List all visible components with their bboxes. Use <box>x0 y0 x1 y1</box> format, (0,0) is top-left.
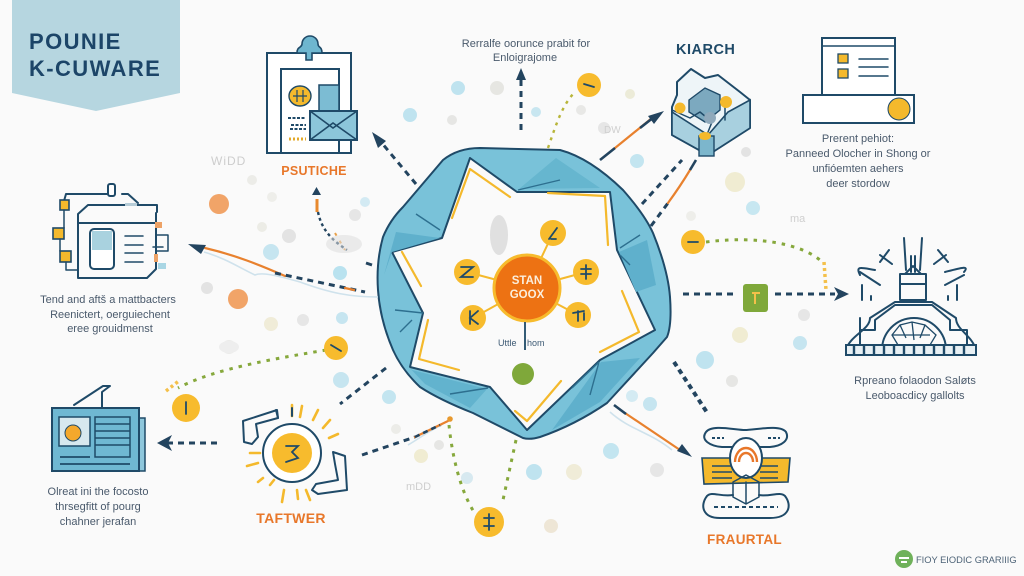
text <box>786 133 931 190</box>
icon: device with connectors <box>53 184 168 278</box>
footer logo: FIOY EIODIC GRARIIIG <box>916 555 1017 565</box>
panel: PSUTICHE clipboard <box>267 36 357 178</box>
coin: right <box>681 230 705 254</box>
text <box>40 294 176 335</box>
hub: central orange circle and spokes: GOOX <box>510 289 545 301</box>
icon: temple <box>846 238 976 355</box>
hub node: left <box>454 259 480 285</box>
hub node: lower right <box>565 302 591 328</box>
text: Olreat ini the focosto <box>48 486 148 498</box>
arrow: dashes below KIARCH <box>642 160 696 226</box>
hub caption: hom <box>527 338 545 348</box>
label: PSUTICHE <box>281 164 347 178</box>
icon: screen with tray <box>803 38 914 123</box>
coin: lower left <box>172 394 200 422</box>
text: Reenictert, oerguiechent <box>50 309 170 321</box>
scattered background dots <box>201 81 810 533</box>
text block: top caption: Enloigrajome <box>493 52 557 64</box>
title banner: K-CUWARE <box>29 56 161 81</box>
footer logo <box>895 550 1017 568</box>
arrow: dotted to top coin <box>548 92 575 148</box>
label: TAFTWER <box>256 510 326 526</box>
arrow: to top caption <box>516 68 526 130</box>
arrow: dashes to lower right panel <box>674 362 708 414</box>
arrow: dotted to left coin <box>166 350 326 391</box>
text <box>854 375 976 402</box>
arrow: dotted to right coin and beyond <box>706 240 826 290</box>
text: deer stordow <box>826 178 890 190</box>
panel: left machine <box>40 184 176 335</box>
hub caption: Uttle <box>498 338 517 348</box>
icon: document card <box>52 386 145 471</box>
heading: KIARCH <box>676 42 735 58</box>
text: Leoboacdicy gallolts <box>865 390 965 402</box>
scattered background dots: WiDD <box>211 154 246 168</box>
title banner: POUNIE <box>29 29 122 54</box>
panel: FRAURTAL <box>702 428 790 547</box>
coin: top <box>577 73 601 97</box>
hub node: right <box>573 259 599 285</box>
icon: badge with ribbon <box>702 428 790 518</box>
scattered background dots: mDD <box>406 481 431 493</box>
text: chahner jerafan <box>60 516 136 528</box>
text: Tend and aftš a mattbacters <box>40 294 176 306</box>
coin: bottom <box>474 507 504 537</box>
hub caption <box>498 322 545 350</box>
text: Rpreano folaodon Saløts <box>854 375 976 387</box>
arrows <box>157 68 849 537</box>
icon: isometric structure <box>672 69 750 156</box>
arrow: dash to lower-left document <box>157 435 217 451</box>
arrow: to top-left panel <box>372 132 416 184</box>
panel: lower-left document <box>48 386 148 528</box>
text: Prerent pehiot: <box>822 133 894 145</box>
text: eree grouidmenst <box>67 323 153 335</box>
hub: central orange circle and spokes: STAN <box>512 275 542 287</box>
arrow: mottled up arrow below PSUTICHE <box>312 187 372 265</box>
scattered background dots: DW <box>604 125 621 136</box>
text: unfióemten aehers <box>812 163 904 175</box>
arrow: dotted down to bottom coin <box>449 425 516 512</box>
icon: coin with hands <box>243 405 347 502</box>
label: FRAURTAL <box>707 532 782 547</box>
yellow star outline segments <box>402 169 639 421</box>
title banner <box>12 0 180 111</box>
arrow: to right panel <box>683 287 849 301</box>
green hub dot <box>512 363 534 385</box>
panel: present project <box>786 38 931 190</box>
scattered background dots: ma <box>790 213 806 225</box>
icon: clipboard with envelope <box>267 36 357 153</box>
arrow: to KIARCH <box>600 111 664 160</box>
panel: temple right <box>846 238 976 402</box>
central folded blue ring <box>378 148 671 439</box>
arrow: short dash upper left <box>340 368 386 404</box>
arrow: to left panel <box>188 244 378 297</box>
hub: central orange circle and spokes <box>454 220 599 331</box>
panel: TAFTWER sun coin <box>243 405 347 526</box>
hub node: top <box>540 220 566 246</box>
panel: KIARCH <box>672 42 750 156</box>
text block: top caption: Rerralfe oorunce prabit for <box>462 38 591 50</box>
hub node: lower left <box>460 305 486 331</box>
text: thrsegfitt of pourg <box>55 501 141 513</box>
text: Panneed Olocher in Shong or <box>786 148 931 160</box>
green badge <box>743 284 768 312</box>
grey glyph smudge <box>490 215 508 255</box>
arrow: to TAFTWER <box>362 416 453 455</box>
coin: left mid <box>324 336 348 360</box>
text <box>48 486 148 528</box>
arrow: to FRAURTAL <box>610 405 692 457</box>
text block: top caption <box>462 38 591 64</box>
